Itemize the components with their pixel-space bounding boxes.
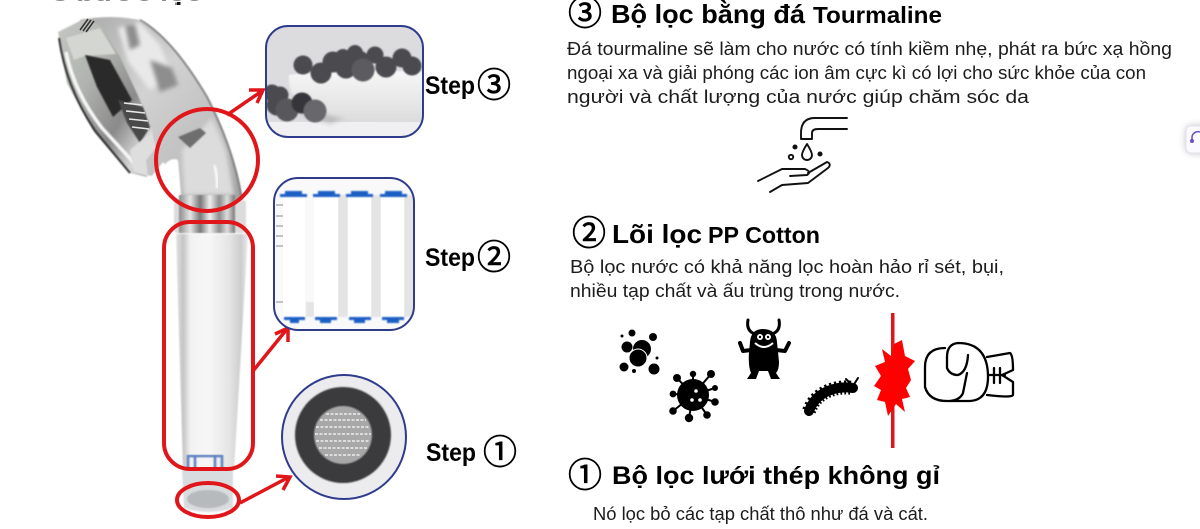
metal band xyxy=(179,195,235,233)
threaded nozzle xyxy=(182,470,233,512)
shower head: lower dark reflection xyxy=(118,100,150,143)
shower head: lower chrome xyxy=(130,132,156,176)
shower head photo xyxy=(58,17,248,512)
section 3 heading: Tourmaline xyxy=(813,2,942,28)
section 1 heading: ① xyxy=(568,448,602,497)
metal collar xyxy=(174,200,246,233)
icon: monster xyxy=(740,320,789,379)
section 3 heading xyxy=(568,0,942,35)
label: Step 2: Step xyxy=(425,244,475,272)
section 2 heading: Lõi lọc xyxy=(612,219,702,249)
label: Step 1: ① xyxy=(483,425,517,474)
shower head: dark rim xyxy=(59,38,130,173)
section 2 heading: PP Cotton xyxy=(708,222,820,248)
disc shadow xyxy=(300,113,342,126)
shower head: upper pale band xyxy=(66,28,116,60)
section 2 text xyxy=(570,257,1004,301)
shower head: housing shadows xyxy=(125,24,178,92)
label: Step 3: Step xyxy=(425,72,475,100)
photo: stainless steel mesh xyxy=(282,375,406,499)
icon: water on hand xyxy=(758,118,847,192)
label: Step 2 xyxy=(425,230,511,279)
filter body xyxy=(176,234,248,470)
photo: PP cotton filters xyxy=(274,178,414,330)
neck: white notch xyxy=(160,159,181,196)
shower head: top vents xyxy=(80,19,94,32)
icon: virus xyxy=(669,370,719,422)
shower head: dark reflection xyxy=(85,55,132,117)
section 3 text: Đá tourmaline sẽ làm cho nước có tính kiềm nhẹ, phát ra bức xạ hồng xyxy=(567,39,1172,59)
icon: boxing glove xyxy=(925,343,1013,401)
label: Step 2: ② xyxy=(477,230,511,279)
icon: red impact burst xyxy=(874,340,915,416)
label: Step 1 xyxy=(426,425,517,474)
shower head: housing knob xyxy=(118,22,172,90)
red highlight ellipse: step 1 xyxy=(177,483,239,517)
small drops xyxy=(789,145,822,159)
faucet xyxy=(801,118,847,139)
icon: bubbles of dirt xyxy=(620,330,660,374)
section 2 text: Bộ lọc nước có khả năng lọc hoàn hảo rỉ sét, bụi, xyxy=(570,257,1004,277)
white stone disc xyxy=(288,70,422,106)
neck: inner cotton xyxy=(182,118,234,195)
arrow to step 1 xyxy=(240,476,290,503)
arrow to step 3 xyxy=(227,90,263,115)
section 1 heading xyxy=(568,448,940,497)
section 2 heading xyxy=(572,206,820,255)
blue cartridge end xyxy=(188,456,222,470)
shower head: grille xyxy=(124,103,149,129)
neck: bright streak xyxy=(214,165,217,188)
section 1 text: Nó lọc bỏ các tạp chất thô như đá và cát. xyxy=(593,504,928,524)
section 2 heading: ② xyxy=(572,206,606,255)
cropped heading at top edge xyxy=(56,0,198,5)
tourmaline balls xyxy=(264,45,422,122)
hand xyxy=(758,162,830,192)
section 3 text: ngoại xa và giải phóng các ion âm cực kì có lợi cho sức khỏe của con xyxy=(567,63,1146,83)
water drops xyxy=(802,144,812,160)
shower head: clear housing xyxy=(80,17,243,200)
filter cartridges xyxy=(314,197,404,317)
gaps between cartridges xyxy=(306,195,414,317)
shower head: chrome face xyxy=(58,19,153,177)
photo: tourmaline stones xyxy=(264,26,424,137)
shower head: bright rim xyxy=(66,52,136,165)
section 2 text: nhiều tạp chất và ấu trùng trong nước. xyxy=(570,281,900,301)
measuring ticks xyxy=(276,205,283,302)
neck: dark glint xyxy=(178,128,206,148)
arrow to step 2 xyxy=(253,328,288,371)
label: Step 1: Step xyxy=(426,439,476,467)
shower head: housing outer edge xyxy=(140,20,241,196)
red highlight rectangle: step 2 xyxy=(164,222,253,469)
red blocking line xyxy=(891,313,894,448)
label: Step 3: ③ xyxy=(477,58,511,107)
blue caps xyxy=(280,191,407,323)
section 1 heading: Bộ lọc lưới thép không gỉ xyxy=(612,462,940,490)
nozzle opening xyxy=(187,490,229,508)
floating support widget xyxy=(1186,126,1200,153)
red highlight circle: step 3 xyxy=(156,109,258,211)
label: Step 3 xyxy=(425,58,511,107)
section 3 text xyxy=(567,39,1172,107)
icon: larva xyxy=(809,378,858,411)
section 3 text: người và chất lượng của nước giúp chăm sóc da xyxy=(567,87,1030,107)
